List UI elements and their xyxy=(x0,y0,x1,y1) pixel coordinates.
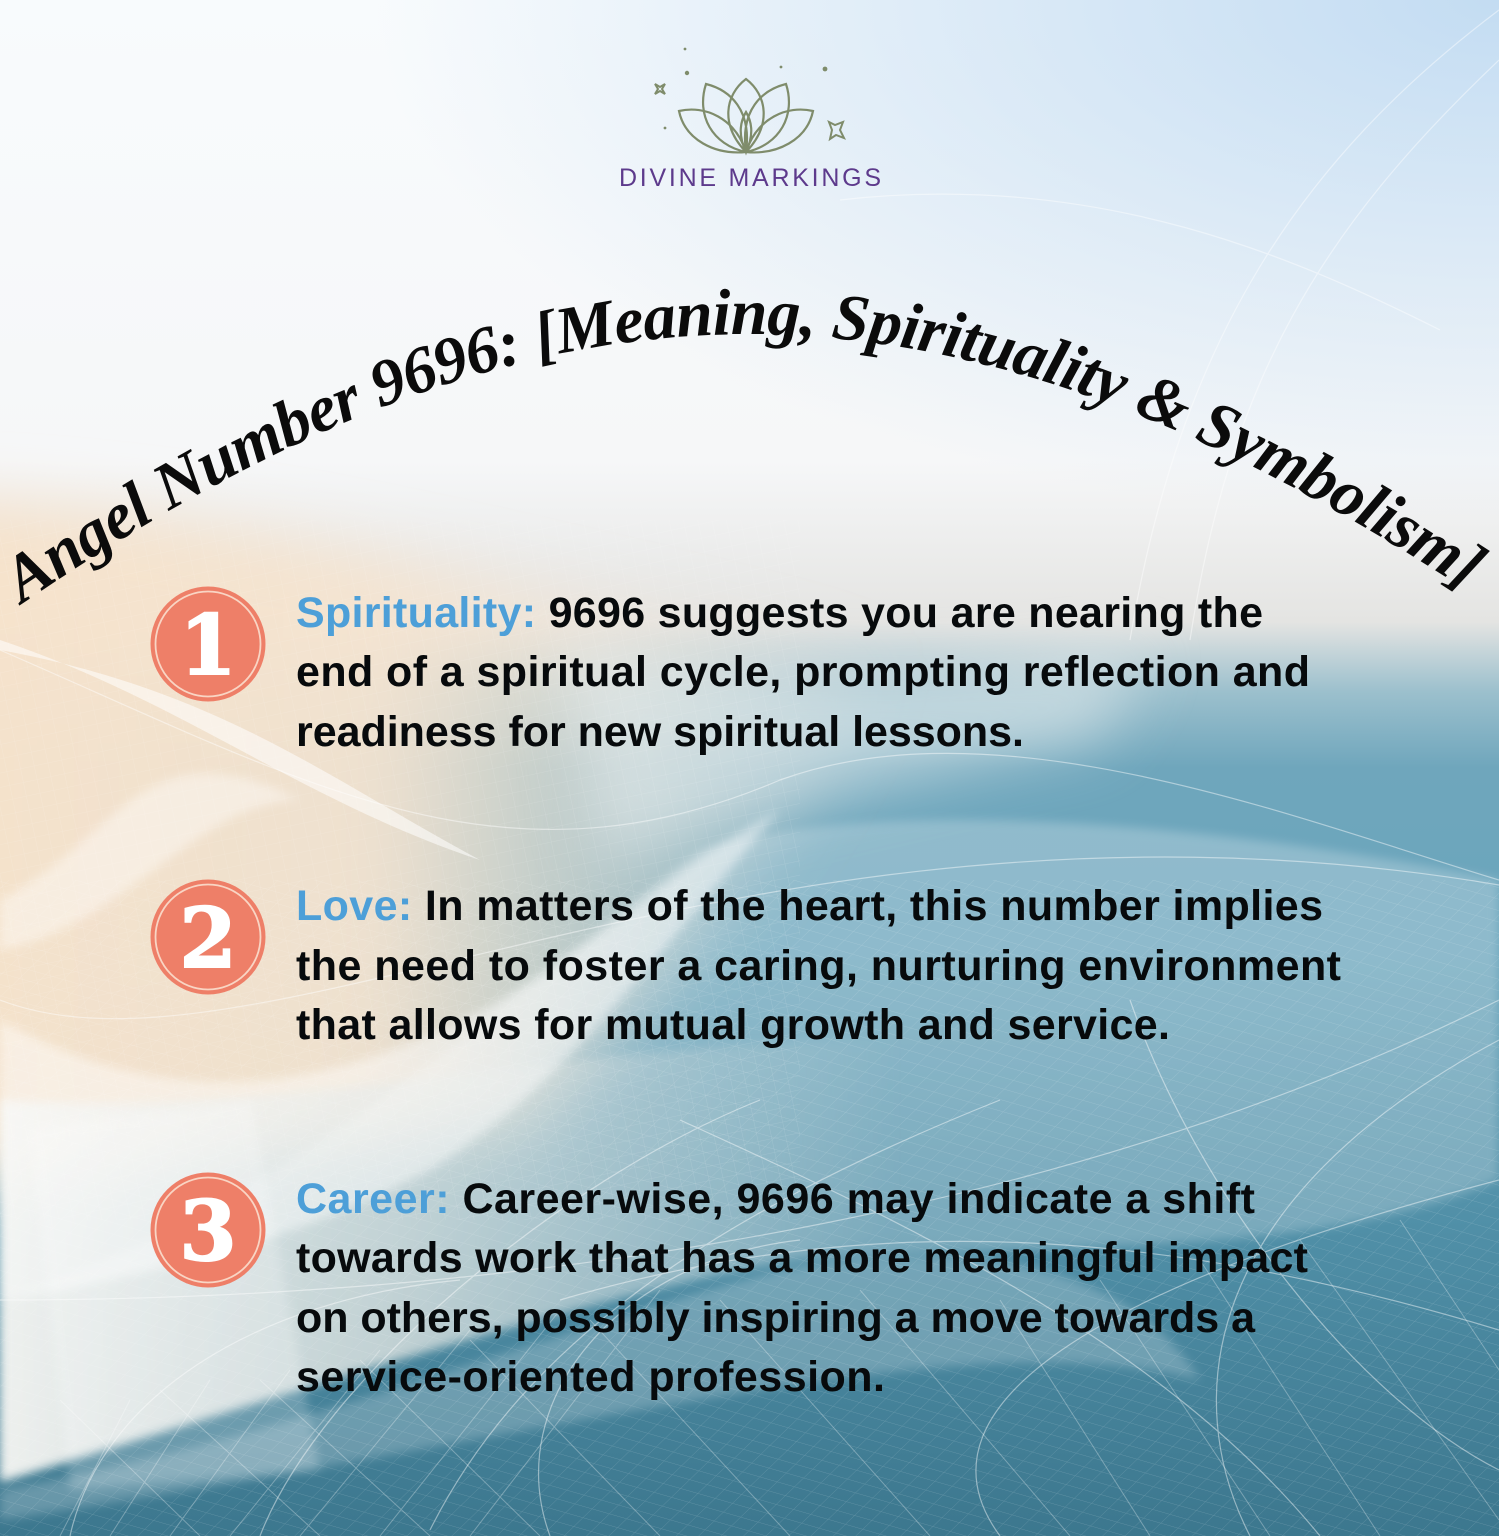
text: career: towards work that has a more meaningful impact xyxy=(296,1234,1308,1282)
text: spirituality: readiness for new spiritual lessons. xyxy=(296,708,1024,756)
text: spirituality: Spirituality: 9696 suggests you are nearing the xyxy=(296,589,1263,637)
item 1: spirituality xyxy=(150,586,1310,756)
logo wordmark: DIVINE MARKINGS xyxy=(619,164,881,192)
title: Angel Number 9696: [Meaning, Spirituality & Symbolism] xyxy=(16,288,1490,606)
icon: lotus xyxy=(679,79,813,152)
icon: sparkles xyxy=(655,84,844,139)
logo: Divine Markings xyxy=(619,48,881,192)
text: love: that allows for mutual growth and service. xyxy=(296,1001,1170,1049)
item 2: love xyxy=(150,880,1341,1049)
badge 3 xyxy=(150,1172,266,1288)
text: career: on others, possibly inspiring a move towards a xyxy=(296,1294,1256,1342)
badge 2 xyxy=(150,880,266,994)
text: career xyxy=(296,1175,1308,1401)
text: career: Career: Career-wise, 9696 may indicate a shift xyxy=(296,1175,1255,1223)
icon: dots xyxy=(664,48,827,129)
text: love: the need to foster a caring, nurturing environment xyxy=(296,942,1341,990)
badge 3: 3 xyxy=(179,1184,237,1280)
text: love xyxy=(296,882,1341,1049)
badge 2: 2 xyxy=(179,891,237,987)
badge 1: 1 xyxy=(179,598,237,694)
item 3: career xyxy=(150,1172,1308,1401)
badge 1 xyxy=(150,586,266,702)
text: spirituality: end of a spiritual cycle, prompting reflection and xyxy=(296,648,1310,696)
text: career: service-oriented profession. xyxy=(296,1353,885,1401)
text: spirituality xyxy=(296,589,1310,756)
text: love: Love: In matters of the heart, this number implies xyxy=(296,882,1323,930)
